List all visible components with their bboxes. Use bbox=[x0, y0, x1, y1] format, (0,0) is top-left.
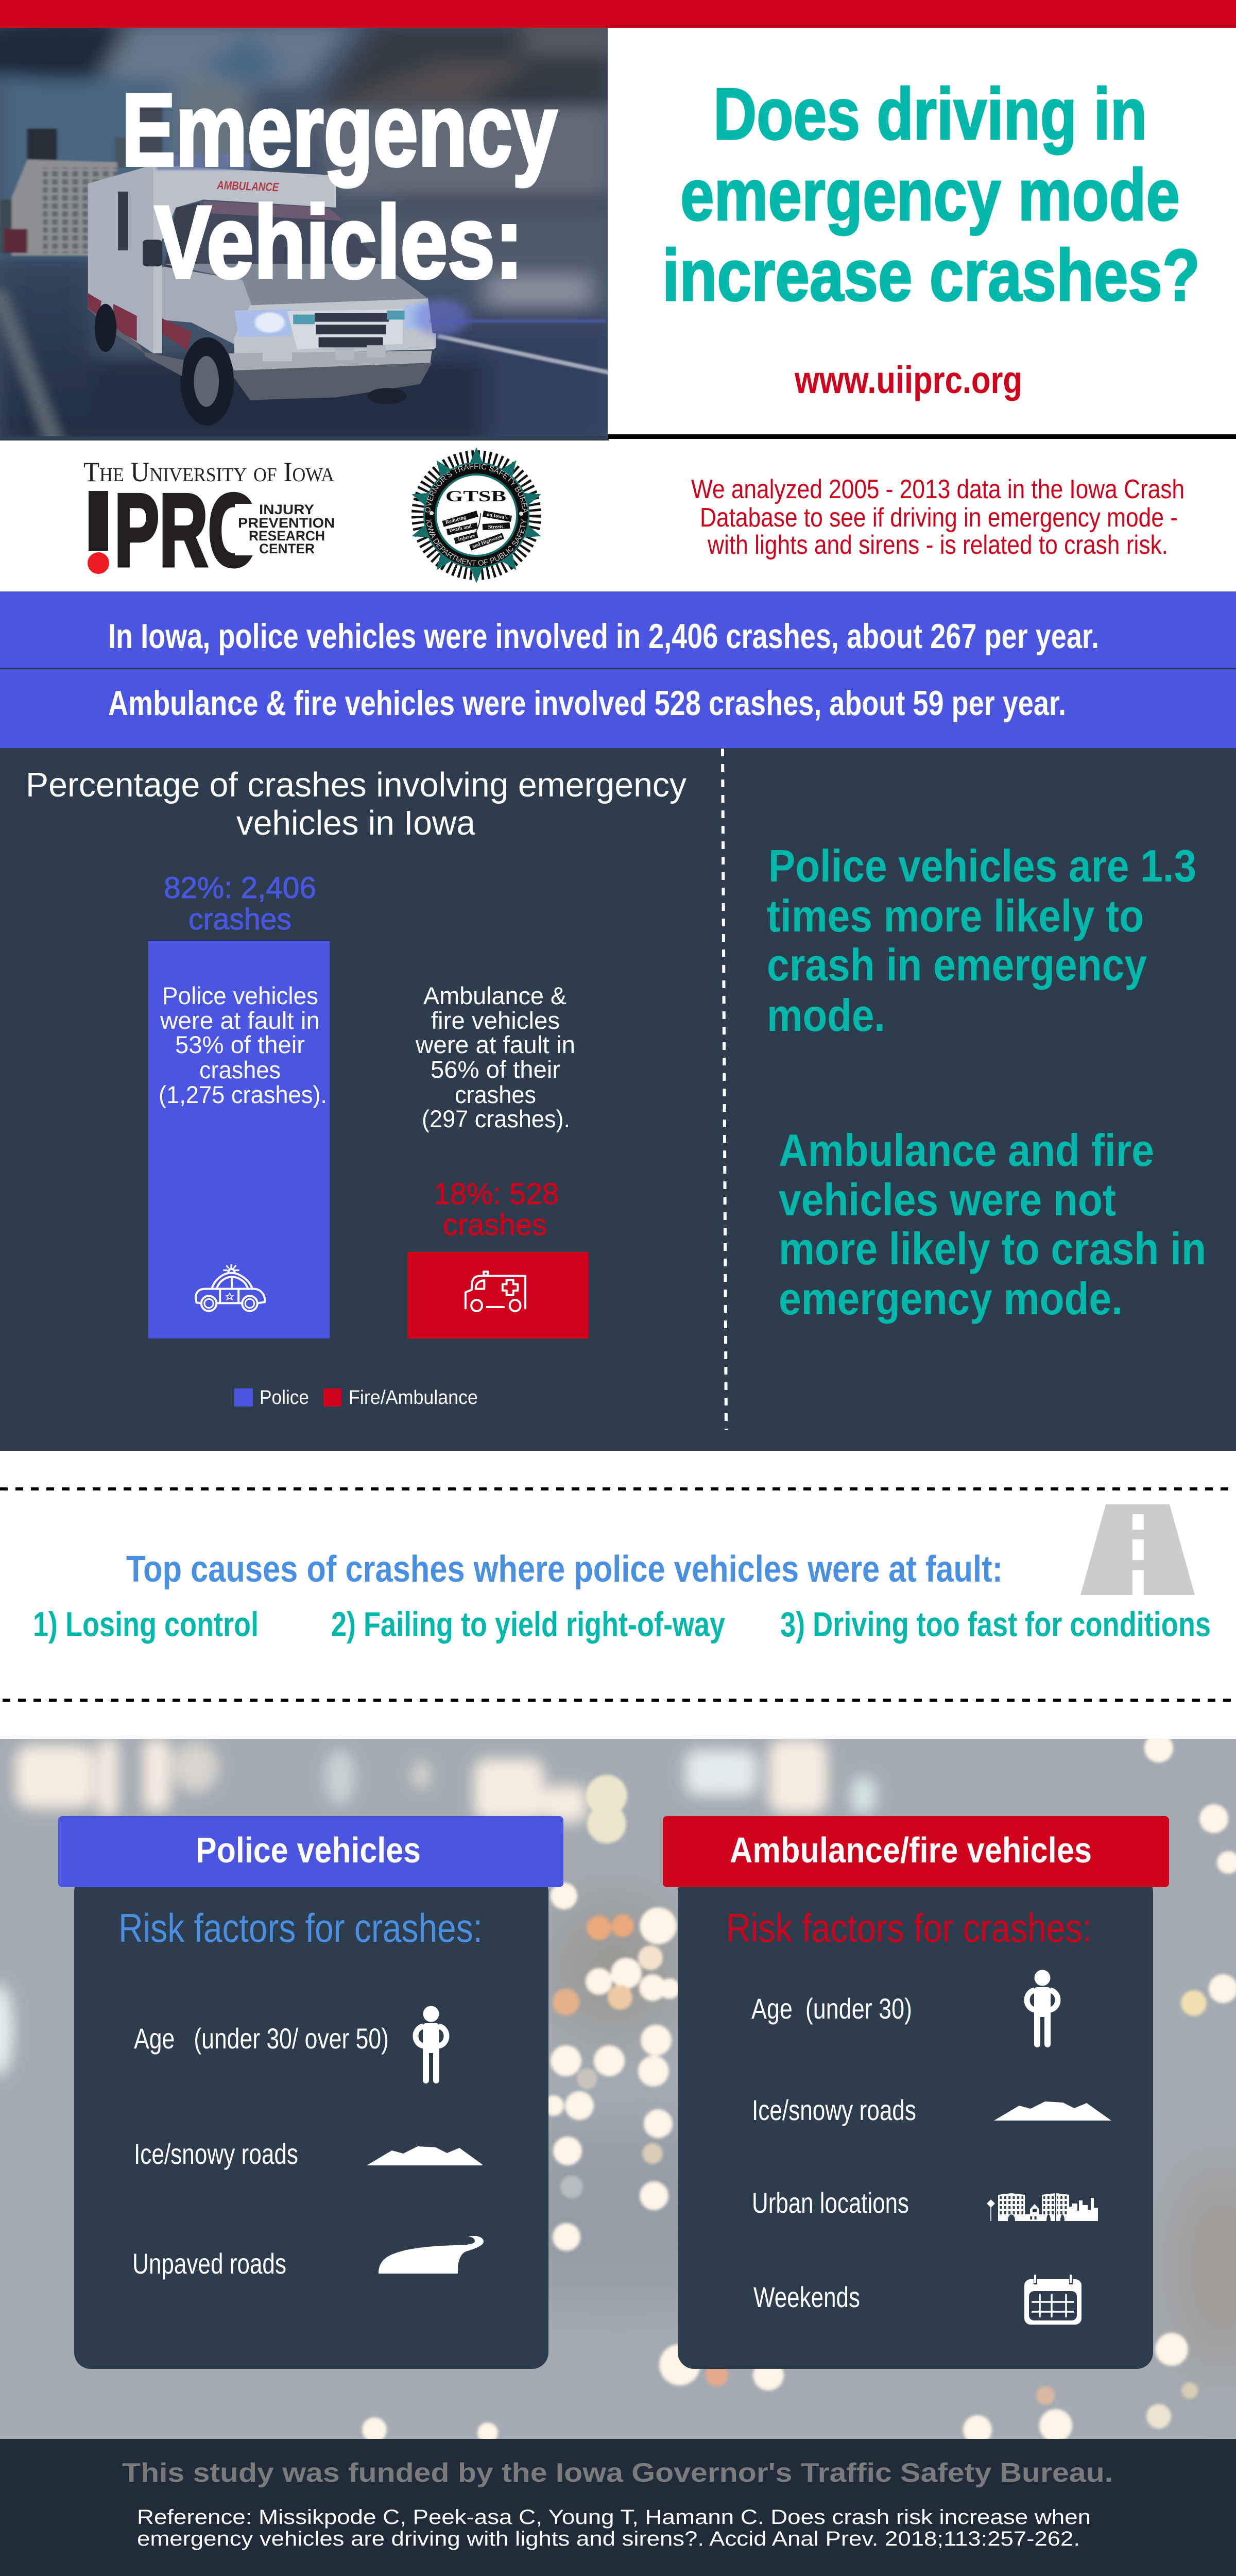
top causes heading: Top causes of crashes where police vehicles were at fault: bbox=[126, 1549, 1003, 1590]
risk factor: ice and snowy roads bbox=[134, 2138, 484, 2170]
ambulance value label: crashes bbox=[443, 1208, 547, 1242]
logo: GTSB seal bbox=[411, 447, 541, 583]
risk factor: ice and snowy roads: Ice/snowy roads bbox=[134, 2138, 298, 2170]
logo: GTSB seal: Streets bbox=[488, 524, 503, 530]
police value label: crashes bbox=[188, 903, 291, 936]
police fault text bbox=[159, 982, 327, 1108]
risk factor: ice and snowy roads bbox=[752, 2094, 1111, 2126]
police value label: 82%: 2,406 bbox=[164, 871, 316, 905]
police fault text: Police vehicles bbox=[162, 982, 318, 1009]
title: Emergency Vehicles: Vehicles: bbox=[154, 185, 523, 300]
reference citation: emergency vehicles are driving with lights and sirens?. Accid Anal Prev. 2018;113:257-262. bbox=[137, 2528, 1080, 2550]
risk factor: age bbox=[751, 1970, 1058, 2047]
panel header: ambulance and fire vehicles: Ambulance/fire vehicles bbox=[730, 1830, 1092, 1870]
reference citation bbox=[137, 2506, 1091, 2550]
panel header: police vehicles: Police vehicles bbox=[196, 1830, 421, 1870]
panel header: police vehicles bbox=[58, 1816, 563, 1887]
website link: www.uiiprc.org bbox=[794, 359, 1022, 401]
logo: University of Iowa IPRC: CENTER bbox=[259, 541, 315, 556]
ambulance and fire fault text: were at fault in bbox=[415, 1031, 575, 1058]
question headline bbox=[662, 73, 1200, 316]
study description: with lights and sirens - is related to crash risk. bbox=[707, 530, 1168, 560]
logo: GTSB seal: Death and bbox=[449, 523, 472, 534]
panel header: ambulance and fire vehicles bbox=[663, 1816, 1169, 1887]
logo: GTSB seal: GTSB bbox=[445, 487, 506, 505]
logo: GTSB seal: GOVERNOR'S TRAFFIC SAFETY BUREAU bbox=[425, 464, 528, 513]
risk factor: age: Age (under 30/ over 50) bbox=[134, 2022, 389, 2055]
logo: GTSB seal: Injuries bbox=[457, 533, 476, 543]
ambulance value label bbox=[434, 1177, 559, 1242]
logo: GTSB seal: and Highways bbox=[471, 534, 503, 550]
ambulance value label: 18%: 528 bbox=[434, 1177, 559, 1211]
chart legend bbox=[234, 1387, 478, 1409]
ambulance and fire fault text: (297 crashes). bbox=[422, 1105, 570, 1132]
risk factor: urban locations: Urban locations bbox=[752, 2187, 909, 2219]
wheels bbox=[181, 337, 234, 426]
top causes list bbox=[33, 1605, 1211, 1644]
logo: University of Iowa IPRC: PRC bbox=[114, 473, 256, 588]
dark results panel bbox=[0, 748, 1236, 1451]
risk factor: urban locations bbox=[752, 2187, 1098, 2221]
police bar bbox=[148, 941, 330, 1338]
police fault text: (1,275 crashes). bbox=[159, 1081, 327, 1108]
finding: ambulance and fire: emergency mode. bbox=[779, 1273, 1123, 1324]
icon: ambulance bbox=[466, 1272, 525, 1311]
risk factor: unpaved roads: Unpaved roads bbox=[132, 2247, 286, 2280]
subheading: ambulance and fire risk factors: Risk factors for crashes: bbox=[726, 1905, 1092, 1951]
chart title: Percentage of crashes involving emergency bbox=[26, 766, 686, 804]
bar chart bbox=[148, 871, 589, 1409]
risk factor: age: Age (under 30) bbox=[751, 1992, 912, 2025]
ambulance and fire fault text: crashes bbox=[455, 1081, 536, 1108]
risk factor: unpaved roads bbox=[132, 2236, 484, 2280]
blue emergency glow bbox=[415, 298, 469, 336]
headlights and grille bbox=[234, 309, 291, 337]
police value label bbox=[164, 871, 316, 936]
logo: GTSB seal: Reducing bbox=[445, 515, 467, 526]
black rule under headline bbox=[608, 434, 1236, 439]
finding: ambulance and fire: Ambulance and fire bbox=[779, 1125, 1154, 1176]
chart title bbox=[26, 766, 686, 842]
subheading: police risk factors: Risk factors for crashes: bbox=[118, 1905, 483, 1951]
panel: police risk factors bbox=[58, 1816, 563, 2369]
finding: police: times more likely to bbox=[767, 890, 1144, 941]
dashed vertical divider bbox=[723, 749, 726, 1430]
top causes list: 1) Losing control bbox=[33, 1605, 259, 1644]
question headline: Does driving in bbox=[713, 73, 1147, 155]
finding: police: Police vehicles are 1.3 bbox=[768, 840, 1196, 891]
panel: ambulance and fire risk factors bbox=[663, 1816, 1169, 2369]
study description bbox=[691, 474, 1184, 560]
finding: ambulance and fire bbox=[779, 1125, 1206, 1324]
risk factor: weekends bbox=[753, 2275, 1082, 2325]
risk factor: age bbox=[134, 2006, 447, 2083]
ambulance body bbox=[88, 165, 153, 353]
ambulance bar bbox=[407, 1252, 589, 1338]
blue statistics banner bbox=[0, 591, 1236, 748]
blurred city lights background bbox=[0, 1734, 1236, 2444]
logo: University of Iowa IPRC: INJURY bbox=[259, 502, 314, 517]
footer bbox=[0, 2439, 1236, 2576]
finding: police bbox=[767, 840, 1196, 1041]
ambulance and fire fault text bbox=[415, 982, 575, 1132]
title: Emergency Vehicles: Emergency bbox=[122, 73, 557, 188]
logo: University of Iowa IPRC: PREVENTION bbox=[238, 515, 335, 531]
chart legend: Fire/Ambulance bbox=[349, 1387, 478, 1409]
lettering on ambulance: AMBULANCE bbox=[216, 178, 279, 194]
red checker stripes bbox=[88, 293, 102, 314]
bumper bbox=[229, 350, 432, 371]
logo: University of Iowa IPRC: RESEARCH bbox=[249, 528, 325, 544]
police fault text: were at fault in bbox=[160, 1007, 320, 1034]
ambulance and fire fault text: fire vehicles bbox=[431, 1007, 560, 1034]
title: Emergency Vehicles bbox=[122, 73, 557, 300]
risk factor: ice and snowy roads: Ice/snowy roads bbox=[752, 2094, 916, 2126]
logo: GTSB seal: on Iowa's bbox=[486, 512, 508, 521]
police fault text: 53% of their bbox=[175, 1031, 305, 1058]
ambulance and fire fault text: Ambulance & bbox=[423, 982, 566, 1009]
logo: University of Iowa IPRC: The University of Iowa bbox=[83, 456, 335, 487]
police fault text: crashes bbox=[199, 1056, 281, 1083]
ambulance and fire fault text: 56% of their bbox=[431, 1056, 560, 1083]
top causes list: 2) Failing to yield right-of-way bbox=[331, 1605, 725, 1644]
finding: police: mode. bbox=[767, 990, 885, 1041]
icon: police car bbox=[196, 1265, 265, 1311]
logo: GTSB seal: IOWA DEPARTMENT OF PUBLIC SAFETY bbox=[426, 519, 526, 566]
photo lower strip bbox=[0, 436, 609, 440]
finding: ambulance and fire: vehicles were not bbox=[779, 1174, 1116, 1225]
risk factor: weekends: Weekends bbox=[753, 2281, 860, 2313]
chart legend: Police bbox=[260, 1387, 309, 1409]
icon: road bbox=[1080, 1504, 1195, 1595]
reference citation: Reference: Missikpode C, Peek-asa C, Young T, Hamann C. Does crash risk increase when bbox=[137, 2506, 1091, 2529]
curb and lane marks bbox=[0, 291, 55, 443]
funding note: This study was funded by the Iowa Governor's Traffic Safety Bureau. bbox=[122, 2458, 1113, 2488]
chart title: vehicles in Iowa bbox=[236, 804, 476, 842]
top red bar bbox=[0, 0, 1236, 28]
finding: police: crash in emergency bbox=[767, 939, 1147, 990]
hero photo: ambulance on road bbox=[0, 21, 613, 443]
